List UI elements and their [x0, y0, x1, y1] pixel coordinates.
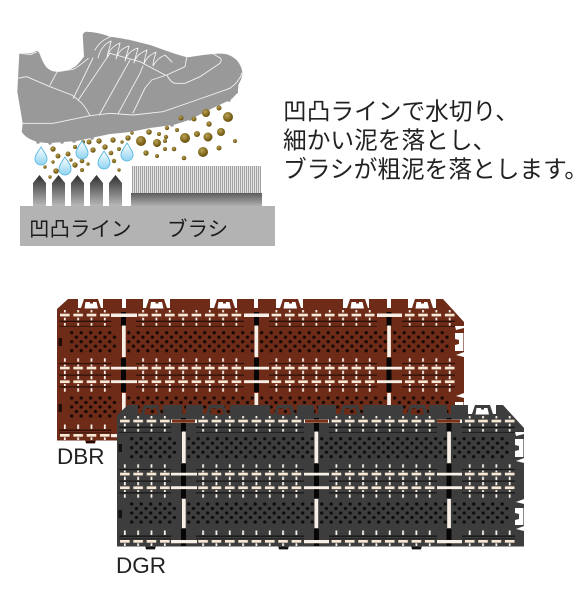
label: DBR: DBR — [57, 444, 105, 469]
label: DGR: DGR — [116, 553, 166, 578]
description text: 凹凸ラインで水切り、 — [283, 98, 519, 126]
description text: 細かい泥を落とし、 — [283, 128, 496, 154]
cleaning diagram — [17, 32, 275, 246]
brush base — [131, 193, 262, 206]
base block — [20, 206, 275, 246]
mud particles — [43, 106, 237, 179]
raised line arrows — [33, 175, 122, 206]
brown mat DBR — [57, 299, 464, 444]
shoe — [17, 32, 242, 145]
label: raised lines: 凹凸ライン — [29, 218, 132, 241]
description text — [283, 98, 580, 184]
brown showing through grey mat — [172, 420, 460, 423]
description text: ブラシが粗泥を落とします。 — [283, 156, 580, 184]
dark grey mat DGR — [117, 405, 524, 550]
water drops — [35, 141, 133, 175]
label: brush: ブラシ — [167, 217, 228, 241]
brush bristles — [132, 166, 261, 193]
